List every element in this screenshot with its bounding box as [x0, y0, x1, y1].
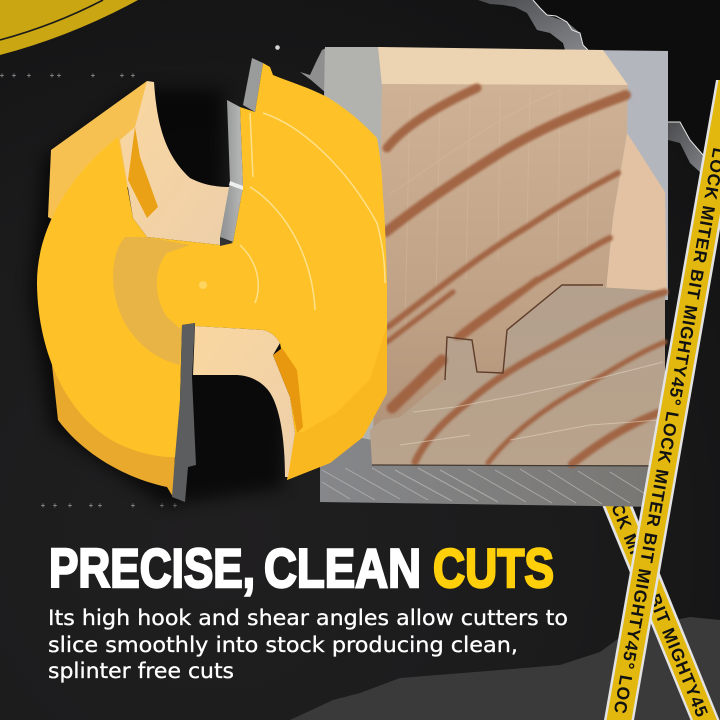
decorative plus marks: bottom: +	[173, 501, 178, 510]
upper pocket orange	[128, 127, 158, 218]
back lobe: upper left	[48, 81, 148, 240]
recessed hub crescent	[113, 237, 190, 365]
decorative plus marks: bottom: +	[160, 501, 165, 510]
wood top face	[378, 47, 628, 86]
wood base line	[372, 465, 665, 466]
torn paper: lighter bottom right	[290, 617, 720, 720]
hub dimple	[199, 281, 207, 289]
decorative plus marks: bottom: +	[53, 501, 58, 510]
decorative plus marks: bottom: +	[41, 501, 46, 510]
router bit cutter	[37, 58, 387, 502]
heading: word CLEAN: CLEAN	[264, 537, 421, 599]
body text: Its high hook and shear angles allow cutters to	[48, 606, 568, 630]
decorative plus marks: top: +	[57, 71, 62, 80]
grey splatter beside photo	[300, 48, 326, 93]
decorative plus marks: bottom: +	[98, 501, 103, 510]
torn paper edge highlight: top	[533, 0, 588, 50]
heading: word PRECISE: PRECISE,	[49, 537, 255, 599]
shoulder of right lobe	[287, 325, 387, 480]
decorative dot	[275, 45, 280, 50]
lower left side band	[52, 365, 175, 497]
wood front face	[372, 84, 628, 465]
wood grain bands	[386, 88, 665, 464]
photo backdrop grey	[320, 47, 668, 300]
tape: second strip	[597, 476, 720, 720]
cutter drop shadow	[30, 89, 293, 505]
metal plate	[320, 430, 665, 507]
wood fibre lines	[388, 90, 590, 330]
gloss lines	[240, 113, 385, 310]
blade: lower	[172, 323, 196, 502]
blade: top outer	[243, 58, 263, 112]
wood pale grain lines	[400, 362, 663, 445]
decorative plus marks: top: +	[91, 71, 96, 80]
blade: top inner	[220, 100, 243, 242]
decorative plus marks: top: +	[12, 71, 17, 80]
decorative plus marks: top	[0, 71, 136, 80]
joint outline	[445, 285, 603, 380]
heading: yellow word: CUTS	[433, 537, 554, 599]
decorative plus marks: bottom: +	[89, 501, 94, 510]
wood right side	[606, 133, 667, 292]
body text: slice smoothly into stock producing clean,	[48, 633, 518, 657]
blade: tip	[220, 237, 233, 246]
blade: highlight	[229, 181, 243, 190]
left grey wall	[320, 47, 386, 470]
torn paper edge strip: right	[668, 122, 708, 175]
body text	[48, 606, 568, 683]
cream cutout: lower	[193, 326, 295, 477]
decorative plus marks: bottom: +	[131, 501, 136, 510]
torn paper edge highlight: right	[668, 122, 703, 155]
decorative plus marks: bottom: +	[68, 501, 73, 510]
torn paper dark corner	[533, 0, 720, 170]
tape text: second strip: LOCK MITER BIT MIGHTY45	[597, 476, 712, 720]
decorative plus marks: top: +	[120, 71, 125, 80]
decorative plus marks: bottom	[41, 501, 178, 510]
torn paper edge strip: top	[478, 0, 588, 50]
body text: splinter free cuts	[48, 659, 234, 683]
wood lower piece	[370, 285, 665, 465]
metal streaks	[322, 468, 655, 504]
decorative plus marks: top: +	[50, 71, 55, 80]
tape: main strip	[604, 80, 720, 720]
photo: wood joint	[300, 47, 668, 507]
main body	[37, 63, 387, 480]
heading	[49, 537, 554, 599]
yellow arc top left	[0, 0, 138, 55]
cream cutout: upper	[120, 81, 230, 245]
lower pocket orange	[273, 348, 303, 433]
decorative plus marks: top: +	[27, 71, 32, 80]
decorative plus marks: top: +	[131, 71, 136, 80]
